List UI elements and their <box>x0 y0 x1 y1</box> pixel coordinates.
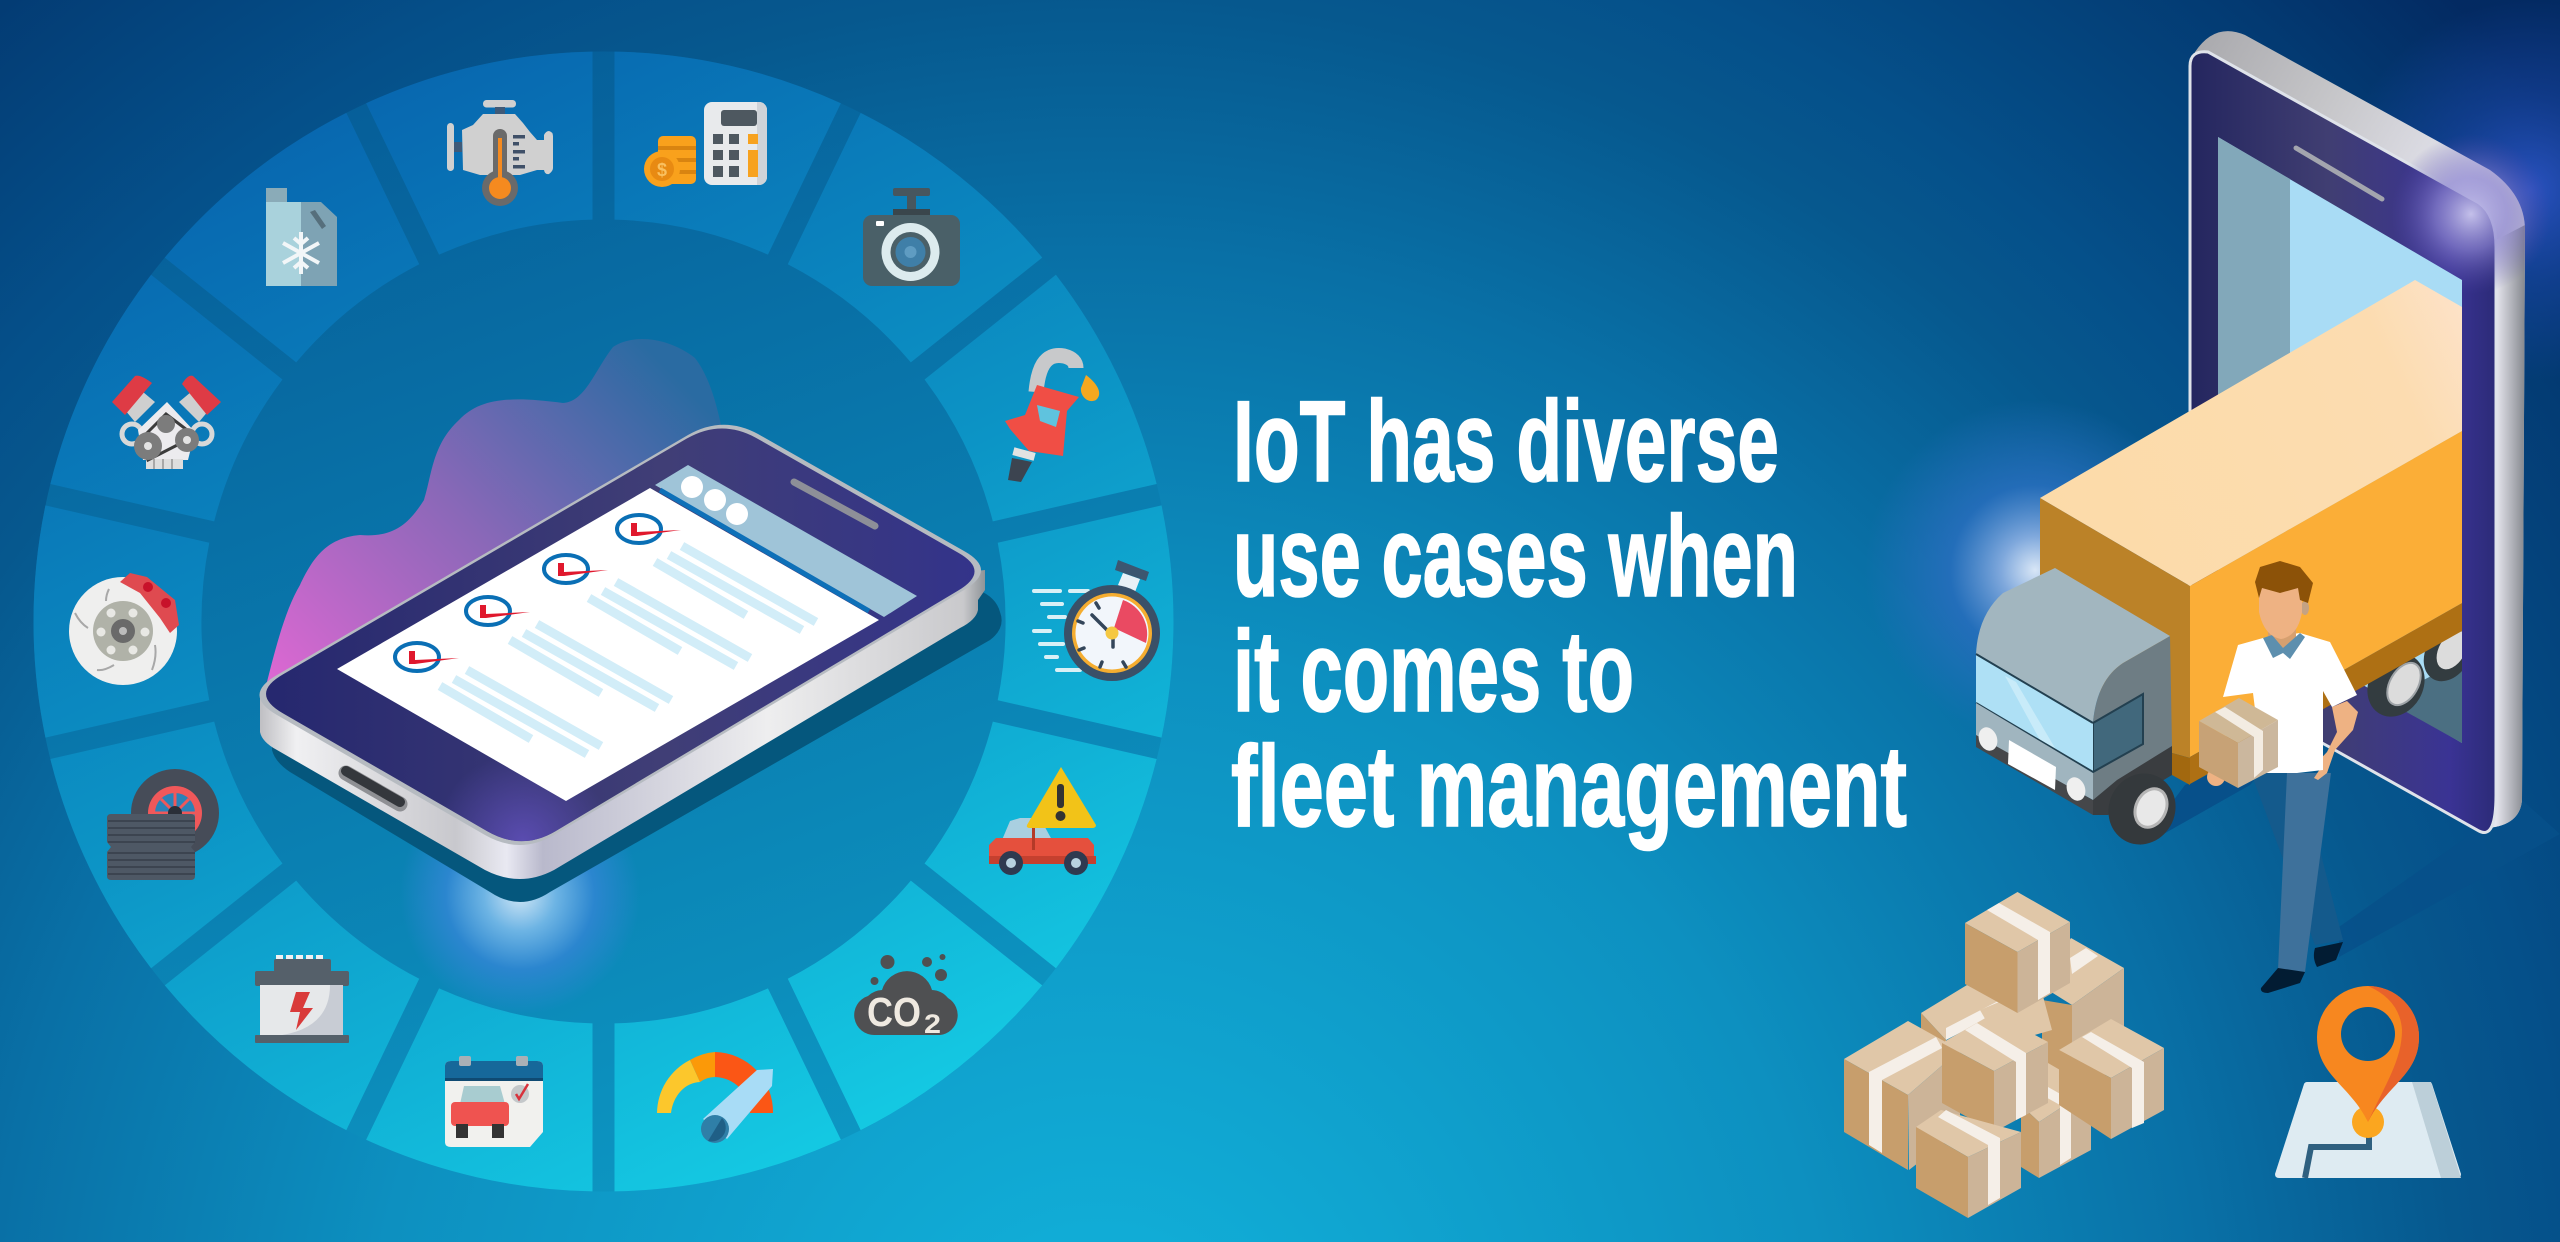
checklist row 3 <box>544 555 750 666</box>
charging port <box>346 771 400 804</box>
central phone with checklist <box>260 339 1002 1015</box>
segment: battery <box>165 881 419 1130</box>
front shoe <box>2261 968 2305 993</box>
phone face <box>2190 52 2496 833</box>
back leg <box>2251 773 2343 945</box>
title text <box>1231 378 1907 851</box>
circular icon ring <box>34 52 1174 1192</box>
floor shadow <box>2339 800 2560 957</box>
map <box>2275 1082 2461 1178</box>
route <box>2305 1125 2369 1178</box>
truck shadow <box>2140 765 2260 845</box>
checklist row 4 <box>617 515 816 630</box>
delivery man <box>2199 561 2358 993</box>
location pin on map <box>2275 986 2461 1178</box>
icon: warning sign and car <box>989 767 1096 875</box>
segment: tires <box>50 722 282 968</box>
icon: engine temperature <box>447 100 553 206</box>
cab <box>1975 568 2172 815</box>
front leg <box>2278 773 2331 972</box>
title text: fleet management <box>1231 723 1907 851</box>
pin shade <box>2368 986 2419 1122</box>
skirt end <box>2172 753 2190 785</box>
ear <box>2301 601 2309 615</box>
icon: CO2 cloud: 2 <box>924 1009 941 1039</box>
title text: use cases when <box>1233 493 1798 621</box>
parcel front <box>1916 1110 2021 1218</box>
map shade <box>2412 1082 2461 1178</box>
phone right edge <box>2488 225 2525 828</box>
segment: speed <box>998 505 1173 738</box>
icon: CO2 cloud: CO <box>867 989 921 1035</box>
icon: calendar and car <box>445 1056 543 1147</box>
segment: service calendar <box>366 988 592 1191</box>
segment: dash camera <box>788 113 1042 362</box>
icon: tires <box>107 769 219 880</box>
speaker slot <box>794 482 875 526</box>
parcel right <box>2059 1019 2164 1139</box>
icon: stopwatch <box>1034 560 1160 681</box>
phone speaker <box>2296 148 2382 199</box>
rear wheels <box>2367 631 2462 717</box>
icon: gauge with needle <box>657 1052 773 1143</box>
checklist row 1 <box>395 643 601 754</box>
arm <box>2313 701 2358 780</box>
icon: CO2 cloud <box>854 954 958 1039</box>
segment: fuel <box>925 275 1157 521</box>
collar <box>2263 633 2305 659</box>
title text: IoT has diverse <box>1233 378 1779 506</box>
icon: coolant can <box>266 188 337 286</box>
icon: V engine <box>112 376 221 469</box>
phone light spot <box>2391 134 2551 294</box>
stacked parcels <box>1844 892 2164 1218</box>
delivery truck <box>1975 280 2482 856</box>
icon: calculator and coins <box>644 102 767 187</box>
segment: CO2 emissions <box>788 881 1042 1130</box>
title text: it comes to <box>1233 608 1634 736</box>
cargo skirt <box>2190 603 2462 784</box>
segment: speed gauge <box>614 988 841 1191</box>
back shoe <box>2314 942 2343 967</box>
phone shadow <box>272 590 1002 902</box>
icon: brake disc <box>69 573 179 685</box>
purple blob behind phone <box>265 339 722 720</box>
large phone <box>2190 31 2551 833</box>
segment: engine temperature <box>366 52 592 255</box>
segment: V engine <box>50 275 282 521</box>
glow behind truck <box>1865 400 2205 740</box>
cargo top <box>2040 280 2462 586</box>
segment: brakes <box>34 505 209 738</box>
parcel top <box>1965 892 2070 1013</box>
hand <box>2207 768 2225 786</box>
glow behind large phone <box>2340 0 2560 380</box>
neck <box>2268 622 2296 652</box>
phone rim <box>260 425 981 845</box>
ring backing disc <box>34 52 1174 1192</box>
front wheel <box>2097 762 2187 856</box>
head <box>2259 588 2302 639</box>
parcel centre <box>1942 1013 2048 1132</box>
icon: fuel nozzle <box>1005 355 1099 482</box>
segment: cost calculator <box>614 52 841 255</box>
phone silver body <box>260 570 985 879</box>
parcel back left <box>1921 985 2052 1060</box>
phone bezel <box>266 428 975 841</box>
pin base <box>2352 1106 2384 1138</box>
phone screen <box>2218 137 2462 743</box>
pin <box>2317 986 2419 1122</box>
phone screen white page <box>337 488 879 801</box>
phone silver back <box>2195 31 2525 828</box>
header blue line <box>660 490 869 611</box>
phone app header <box>655 465 917 617</box>
icon: dash camera <box>863 188 960 286</box>
hair <box>2255 561 2313 603</box>
cargo end <box>2040 498 2190 758</box>
segment: coolant <box>165 113 419 362</box>
checklist row 2 <box>466 597 671 708</box>
light glow under phone <box>400 775 640 1015</box>
parcel left <box>1844 1021 1960 1170</box>
shirt <box>2223 633 2357 773</box>
icon: calculator and coins: $ <box>657 160 667 180</box>
parcel back right <box>2040 938 2124 1100</box>
segment: safety warning <box>925 722 1157 968</box>
parcel front right small <box>2021 1063 2091 1178</box>
icon: car battery <box>255 955 349 1043</box>
parcel held <box>2199 698 2278 788</box>
cargo side <box>2190 431 2462 757</box>
